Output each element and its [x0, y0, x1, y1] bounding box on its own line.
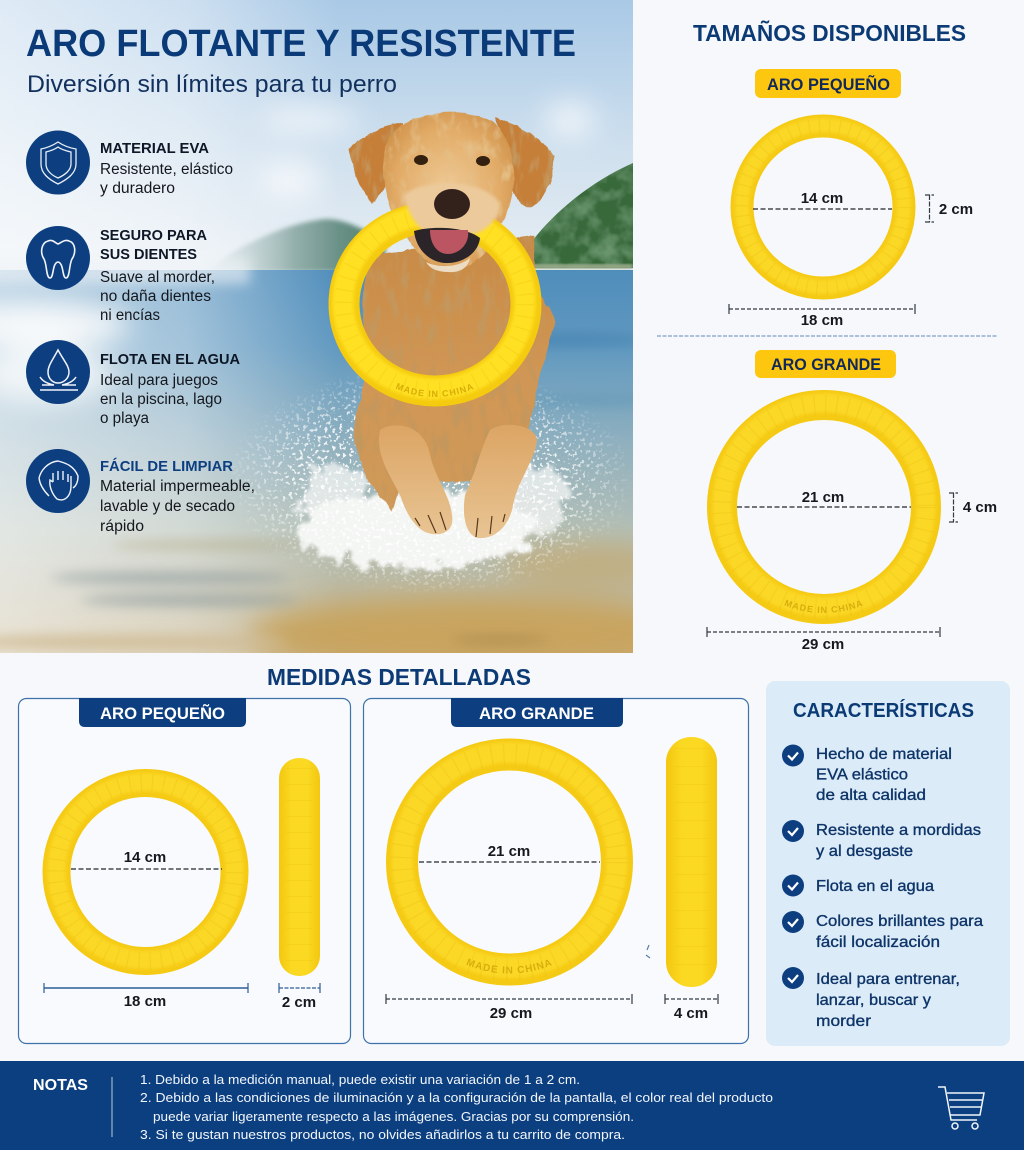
feature: safe for teeth: ni encías [100, 307, 160, 324]
item: bite resistant: y al desgaste [816, 843, 913, 860]
small ring side view [279, 758, 320, 976]
feature: safe for teeth: no daña dientes [100, 288, 211, 305]
panel: characteristics [766, 681, 1010, 1046]
icon: shopping cart [938, 1087, 984, 1129]
feature: material EVA: y duradero [100, 180, 175, 197]
inner diameter 21 cm: 21 cm [802, 489, 844, 506]
item: EVA material: Hecho de material [816, 746, 952, 763]
golden sand reflection [240, 530, 633, 653]
notes text: 1. Debido a la medición manual, puede existir una variación de 1 a 2 cm. [140, 1072, 580, 1087]
outer diameter 29 cm [386, 994, 632, 1022]
soft horizon at left [0, 258, 250, 284]
heading: available sizes: TAMAÑOS DISPONIBLES [693, 19, 966, 46]
outer diameter 29 cm: 29 cm [802, 636, 844, 653]
item: ideal for training: Ideal para entrenar, [816, 971, 960, 988]
right forested hill [534, 163, 633, 268]
item: floats [782, 874, 934, 896]
feature: floats in water [26, 340, 240, 427]
splash droplets [236, 376, 628, 592]
dog body and chest [354, 235, 556, 512]
large ring front view [386, 738, 633, 986]
notes text: puede variar ligeramente respecto a las imágenes. Gracias por su comprensión. [153, 1109, 634, 1124]
tab: large ring [451, 698, 623, 727]
feature: easy to clean: lavable y de secado [100, 498, 235, 515]
badge: small ring: ARO PEQUEÑO [767, 74, 890, 94]
outer diameter 18 cm [729, 304, 915, 329]
large ring side view [666, 737, 717, 987]
feature: floats in water: FLOTA EN EL AGUA [100, 351, 240, 368]
inner diameter 14 cm: 14 cm [124, 849, 166, 866]
feature: safe for teeth: Suave al morder, [100, 269, 215, 286]
splash core [295, 462, 567, 568]
feature: safe for teeth [26, 226, 215, 324]
subtitle: Diversión sin límites para tu perro [27, 71, 397, 98]
notes text [140, 1072, 773, 1142]
dog head [383, 113, 514, 270]
icon: shield [26, 130, 90, 194]
ripples [0, 541, 550, 649]
small artefact marks [646, 945, 650, 958]
footer: notes [0, 1061, 1024, 1150]
dog eyes [414, 155, 490, 166]
notes label: NOTAS [33, 1077, 88, 1094]
item: floats: Flota en el agua [816, 878, 934, 895]
outer diameter 18 cm: 18 cm [124, 993, 166, 1010]
feature: safe for teeth: SUS DIENTES [100, 246, 197, 263]
item: ideal for training: lanzar, buscar y [816, 992, 931, 1009]
item: ideal for training: morder [816, 1013, 872, 1030]
dog open mouth and tongue [414, 228, 480, 272]
panel: small ring details [18, 698, 350, 1044]
item: bright colours: Colores brillantes para [816, 913, 983, 930]
divider [657, 335, 997, 337]
item: bright colours: fácil localización [816, 934, 940, 951]
feature: easy to clean [26, 449, 255, 535]
thickness 4 cm [949, 493, 997, 522]
icon: tooth [26, 226, 90, 290]
title: ARO FLOTANTE Y RESISTENTE [26, 23, 576, 65]
large ring front view: MADE IN CHINA [784, 600, 863, 613]
left wash for text legibility [0, 0, 340, 653]
tab: small ring: ARO PEQUEÑO [100, 703, 225, 723]
hero photo: dog with ring in water [0, 0, 633, 653]
feature: floats in water: en la piscina, lago [100, 391, 222, 408]
dog muzzle and nose [404, 183, 500, 234]
outer diameter 29 cm: 29 cm [490, 1005, 532, 1022]
small ring front view [742, 125, 904, 288]
feature: safe for teeth: SEGURO PARA [100, 227, 207, 244]
feature: easy to clean: rápido [100, 518, 144, 535]
heading: characteristics: CARACTERÍSTICAS [793, 699, 974, 722]
thickness 2 cm: 2 cm [282, 994, 316, 1011]
wave foam at left [0, 303, 130, 403]
panel: available sizes [657, 19, 997, 653]
badge: small ring [755, 69, 901, 98]
yellow ring held by dog [328, 205, 542, 406]
notes text: 3. Si te gustan nuestros productos, no olvides añadirlos a tu carrito de compra. [140, 1127, 625, 1142]
water [0, 270, 633, 653]
outer diameter 18 cm: 18 cm [801, 312, 843, 329]
clouds [260, 102, 595, 198]
feature: material EVA: MATERIAL EVA [100, 140, 209, 157]
item: ideal for training [782, 967, 960, 1030]
feature: material EVA [26, 130, 233, 197]
thickness 2 cm [279, 983, 320, 1011]
panel: large ring details [362, 698, 750, 1044]
item: bright colours [782, 911, 983, 951]
feature: floats in water: o playa [100, 410, 149, 427]
thickness 2 cm: 2 cm [939, 201, 973, 218]
inner diameter 21 cm: 21 cm [488, 843, 530, 860]
notes text: 2. Debido a las condiciones de iluminación y a la configuración de la pantalla, el color real del producto [140, 1090, 773, 1105]
large ring front view [707, 390, 941, 624]
inner diameter 14 cm: 14 cm [801, 190, 843, 207]
thickness 4 cm [665, 994, 718, 1022]
item: EVA material: de alta calidad [816, 787, 926, 804]
feature: easy to clean: FÁCIL DE LIMPIAR [100, 458, 233, 475]
inner diameter 14 cm [753, 190, 892, 209]
sky [0, 0, 633, 275]
dog forelegs [379, 425, 537, 538]
thickness 4 cm: 4 cm [963, 499, 997, 516]
thickness 2 cm [925, 195, 973, 222]
thickness 4 cm: 4 cm [674, 1005, 708, 1022]
tab: large ring: ARO GRANDE [479, 704, 594, 723]
item: EVA material: EVA elástico [816, 766, 908, 784]
shore line [530, 264, 633, 269]
heading: detailed measurements: MEDIDAS DETALLADAS [267, 664, 531, 690]
item: bite resistant [782, 820, 981, 860]
small ring front view [56, 782, 234, 961]
tab: small ring [79, 698, 246, 727]
large ring front view: MADE IN CHINA [466, 958, 552, 974]
feature: material EVA: Resistente, elástico [100, 161, 233, 178]
yellow ring held by dog: MADE IN CHINA [396, 383, 474, 397]
water bands [538, 332, 633, 406]
left distant hill [205, 219, 385, 272]
icon: hand wiping [26, 449, 90, 513]
feature: floats in water: Ideal para juegos [100, 372, 218, 389]
outer diameter 18 cm [44, 983, 248, 1010]
icon: water drop [26, 340, 90, 404]
badge: large ring: ARO GRANDE [771, 355, 881, 374]
dog ears [348, 118, 554, 209]
badge: large ring [755, 350, 896, 378]
outer diameter 29 cm [707, 627, 940, 653]
item: EVA material [782, 744, 952, 804]
item: bite resistant: Resistente a mordidas [816, 822, 981, 839]
feature: easy to clean: Material impermeable, [100, 478, 255, 495]
